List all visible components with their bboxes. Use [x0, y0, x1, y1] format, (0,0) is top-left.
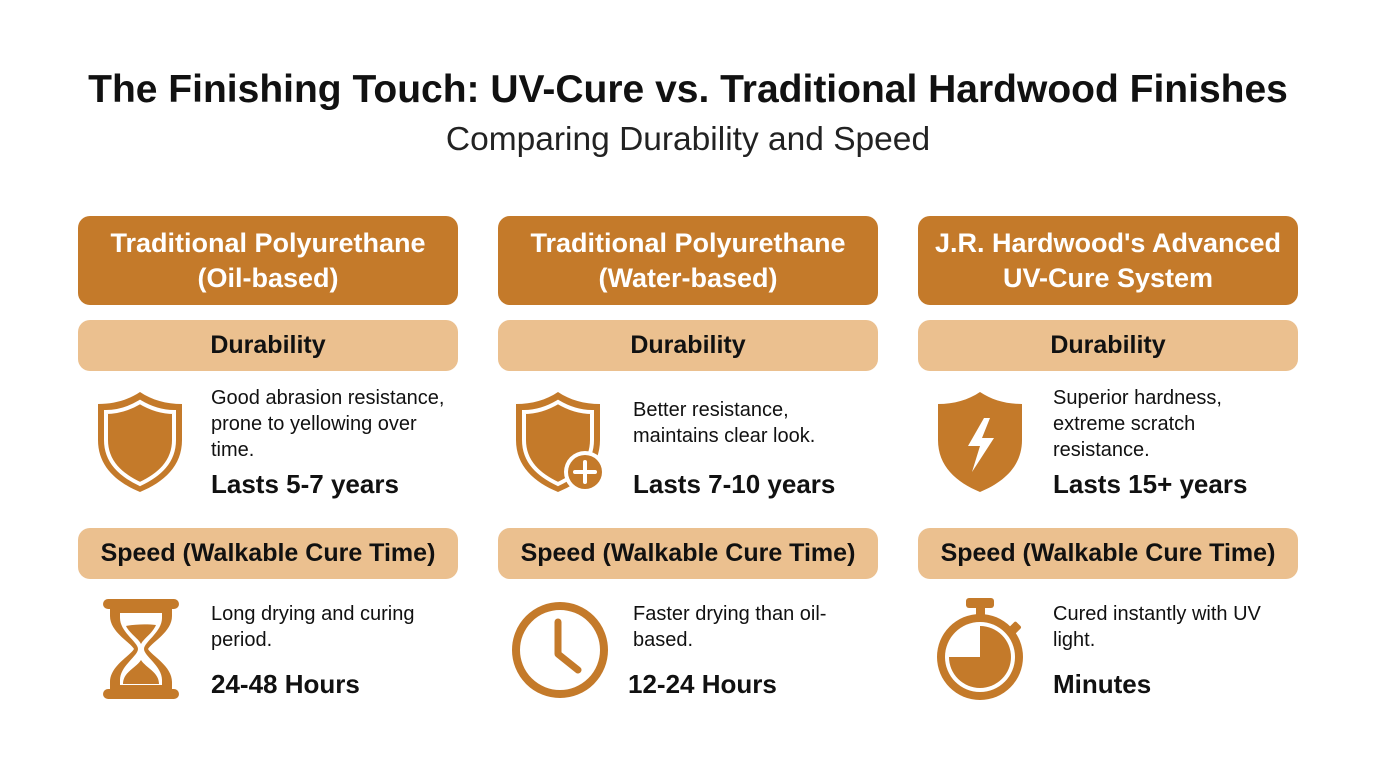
header: oil-based: Traditional Polyurethane	[110, 228, 426, 258]
panel: UV-cure	[918, 216, 1298, 700]
speed bar: Speed (Walkable Cure Time)	[101, 539, 435, 567]
durability bar	[918, 320, 1298, 371]
panel: oil-based	[78, 216, 458, 699]
description: Faster drying than oil-based.	[633, 603, 826, 651]
header: oil-based	[78, 216, 458, 305]
value: Minutes	[1053, 669, 1151, 699]
value: 12-24 Hours	[628, 669, 777, 699]
header: water-based: (Water-based)	[598, 262, 778, 292]
header: oil-based: (Oil-based)	[197, 262, 338, 292]
speed bar	[78, 528, 458, 579]
durability bar: Durability	[1050, 331, 1166, 359]
speed bar	[918, 528, 1298, 579]
icon: stopwatch	[937, 598, 1023, 700]
header: UV-cure	[918, 216, 1298, 305]
description: Long drying and curing period.	[211, 603, 414, 651]
value: Lasts 15+ years	[1053, 469, 1247, 499]
icon: shield	[98, 392, 182, 492]
description: Cured instantly with UV light.	[1053, 603, 1261, 651]
panel: water-based	[498, 216, 878, 699]
subtitle: Comparing Durability and Speed	[446, 121, 930, 158]
speed bar	[498, 528, 878, 579]
icon: shield plus	[516, 392, 602, 492]
description: Superior hardness, extreme scratch resistance.	[1053, 387, 1222, 461]
value: 24-48 Hours	[211, 669, 360, 699]
description: Good abrasion resistance, prone to yellowing over time.	[211, 387, 444, 461]
title: The Finishing Touch: UV-Cure vs. Traditional Hardwood Finishes	[88, 68, 1288, 111]
description: Better resistance, maintains clear look.	[633, 399, 815, 447]
icon: shield lightning	[938, 392, 1022, 492]
speed bar: Speed (Walkable Cure Time)	[521, 539, 855, 567]
value: Lasts 7-10 years	[633, 469, 835, 499]
icon: clock	[512, 602, 608, 698]
durability bar: Durability	[630, 331, 746, 359]
value: Lasts 5-7 years	[211, 469, 399, 499]
durability bar	[498, 320, 878, 371]
header: UV-cure: UV-Cure System	[1003, 262, 1213, 292]
header: UV-cure: J.R. Hardwood's Advanced	[935, 228, 1281, 258]
header: water-based: Traditional Polyurethane	[530, 228, 846, 258]
header: water-based	[498, 216, 878, 305]
durability bar: Durability	[210, 331, 326, 359]
icon: hourglass	[103, 599, 179, 699]
speed bar: Speed (Walkable Cure Time)	[941, 539, 1275, 567]
durability bar	[78, 320, 458, 371]
